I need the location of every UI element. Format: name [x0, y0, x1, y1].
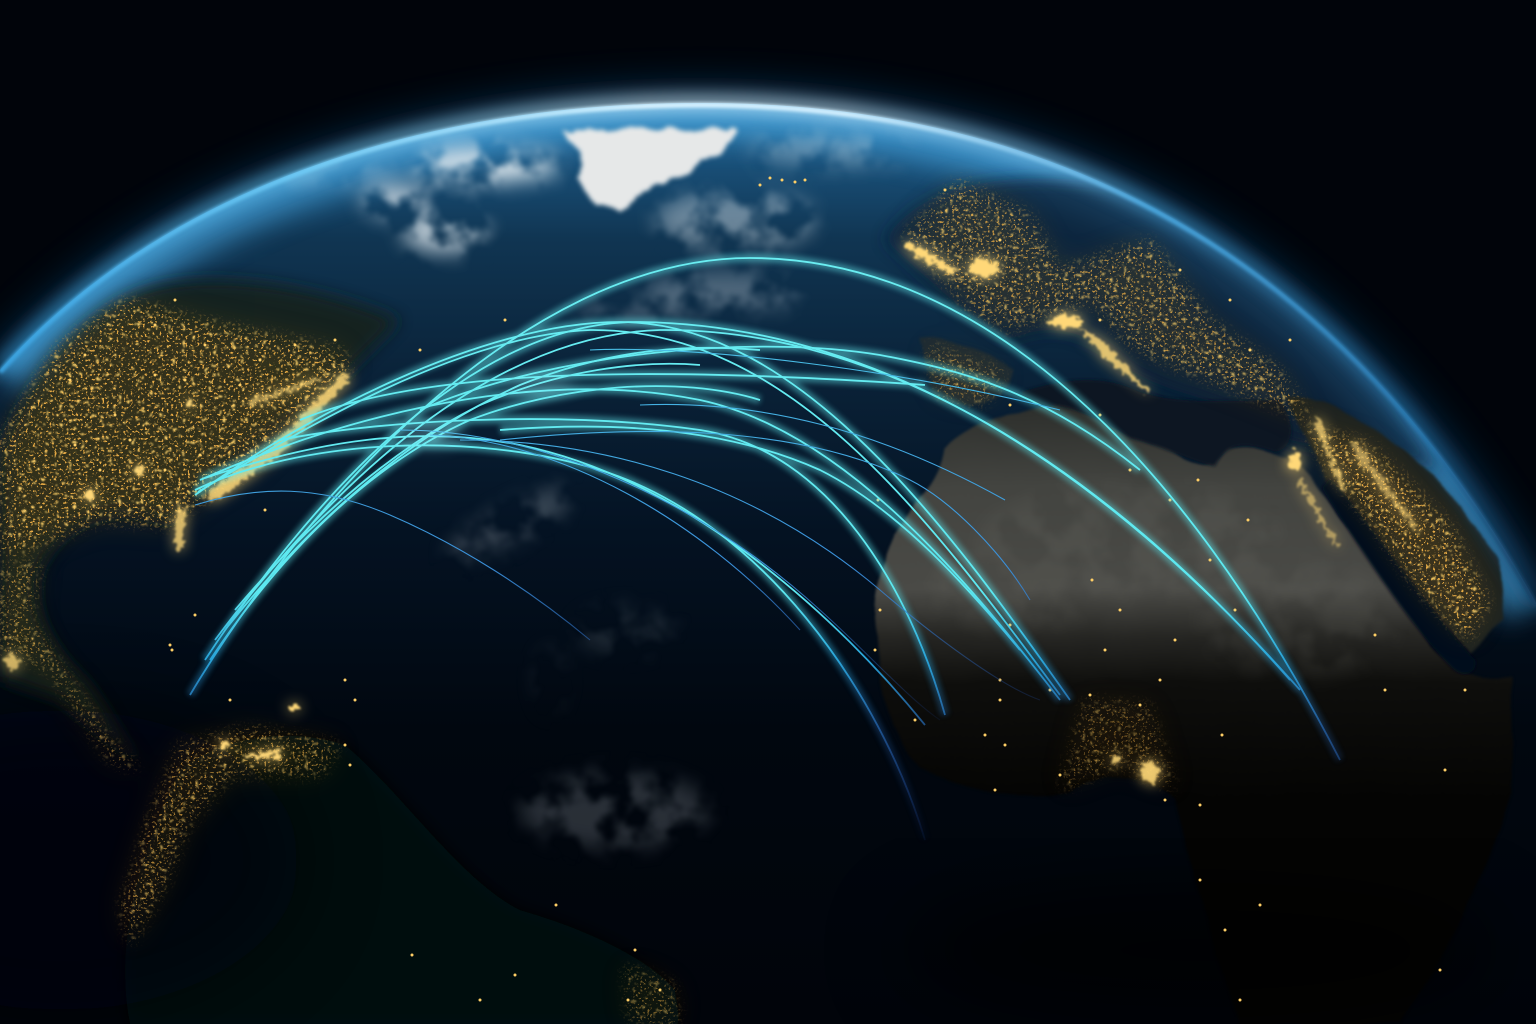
ocean [0, 103, 1536, 698]
land: iberia [918, 338, 1012, 405]
dark vignette over the lower globe [0, 710, 1500, 1020]
red sea [1322, 478, 1475, 674]
clouds: north atlantic [240, 134, 910, 326]
city lights: individual towns [70, 178, 1465, 1000]
land: north america [0, 280, 400, 770]
city lights: fine speckle regions [0, 180, 1488, 1024]
clouds: mid atlantic [440, 476, 710, 848]
atmosphere limb [0, 103, 1536, 605]
mediterranean dark water [1020, 380, 1291, 466]
land: africa sahara [874, 404, 1512, 896]
arcs: bright crossing glow [396, 376, 574, 447]
atmosphere outer glow [0, 103, 1536, 603]
greenland ice [565, 128, 735, 214]
arcs: thin blue filaments [195, 349, 1060, 720]
land: middle east [1285, 395, 1505, 655]
arcs: glow layer [190, 258, 1340, 840]
city glow: broad [0, 180, 1488, 1024]
sahara dust texture [1220, 619, 1362, 674]
limb haze inside the globe [0, 103, 1536, 603]
land: europe [885, 178, 1440, 470]
city lights: larger sparks [0, 180, 1488, 1024]
arcs: core filaments [190, 258, 1340, 840]
land: south america [200, 929, 678, 1024]
city lights: bright metro areas [5, 240, 1420, 783]
